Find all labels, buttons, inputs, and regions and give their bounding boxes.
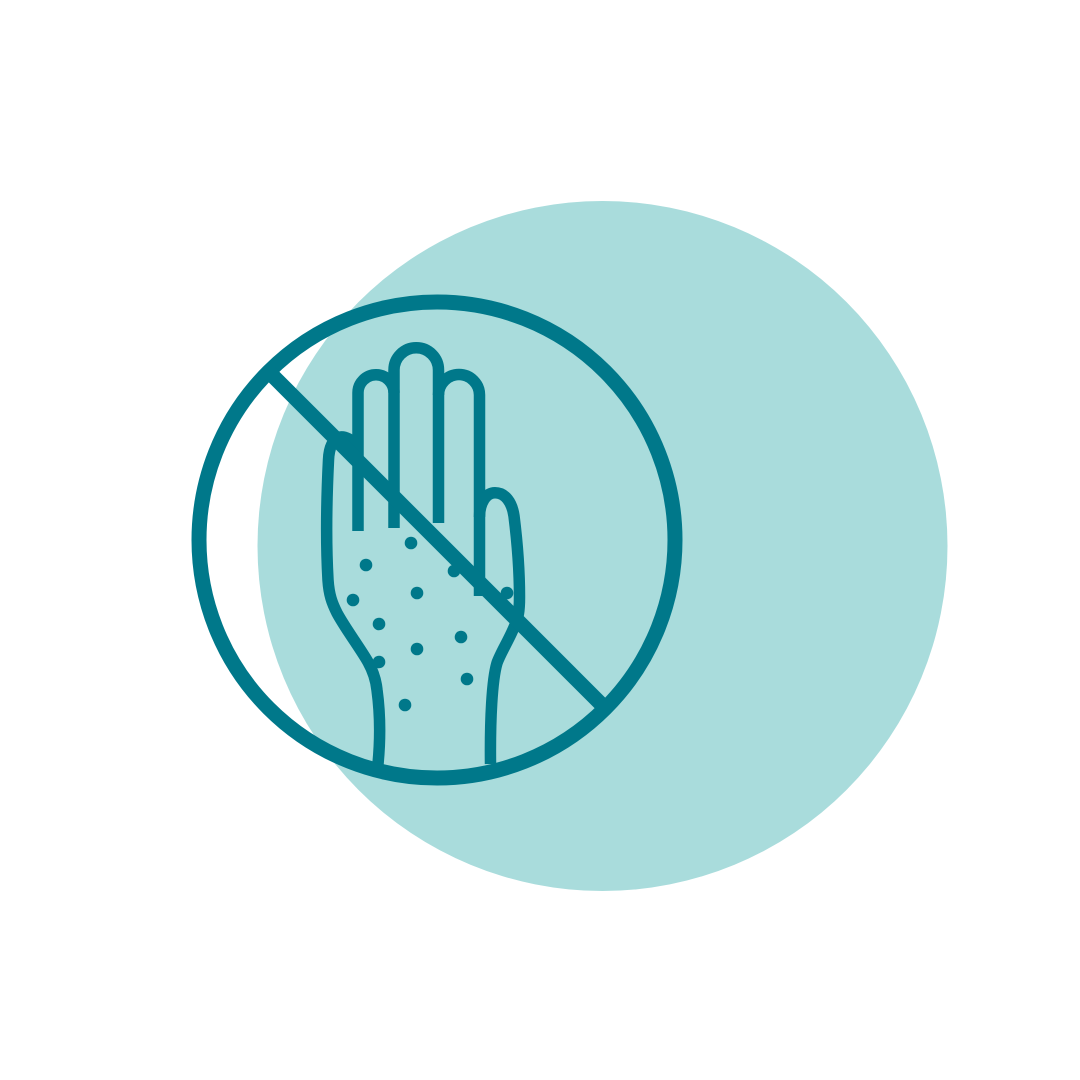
thumb and right wrist <box>480 493 520 764</box>
prohibition ring <box>199 302 675 778</box>
left palm and wrist <box>327 437 380 764</box>
rash dots <box>347 537 513 711</box>
background circle <box>258 201 948 891</box>
prohibition sign <box>199 302 675 778</box>
index finger <box>358 375 394 531</box>
middle finger <box>394 348 438 528</box>
ring finger <box>438 374 480 596</box>
icon: hand with rash dots <box>327 348 520 764</box>
prohibition diagonal <box>269 372 604 707</box>
